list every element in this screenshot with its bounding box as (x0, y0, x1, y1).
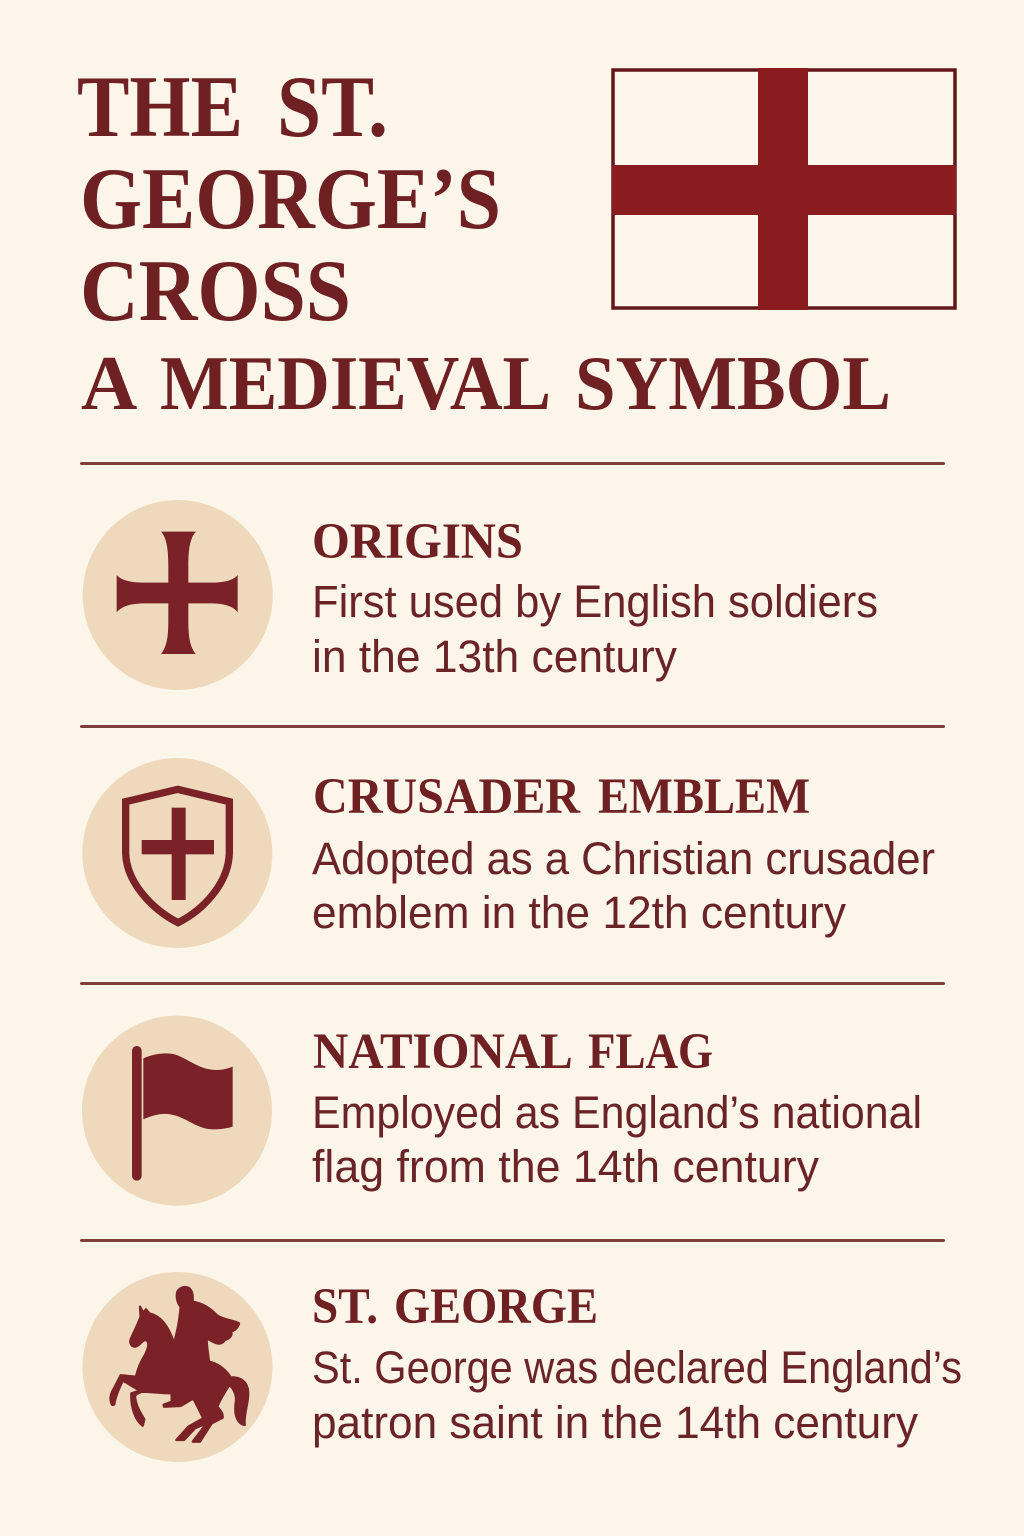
heading: St. George: GEORGE (394, 1279, 598, 1335)
text: national flag description: Employed as England’s national (312, 1087, 922, 1138)
icon: waving flag (82, 1016, 272, 1206)
panel: national flag (82, 1016, 922, 1206)
text: origins description: in the 13th century (312, 631, 677, 682)
title: SYMBOL (575, 340, 891, 426)
text: crusader emblem description: emblem in the 12th century (312, 887, 846, 938)
panel: origins (83, 500, 878, 690)
text: national flag description: flag from the 14th century (312, 1141, 819, 1192)
heading: crusader emblem: EMBLEM (598, 769, 810, 825)
heading: St. George: ST. (312, 1279, 378, 1335)
panel: crusader emblem (82, 758, 935, 948)
text: origins description: First used by English soldiers (312, 576, 878, 627)
icon: cross pattée (83, 500, 273, 690)
text: St. George description (312, 1342, 962, 1448)
icon: mounted rider silhouette (82, 1272, 272, 1462)
panel: St. George (82, 1272, 962, 1462)
title: CROSS (80, 243, 351, 340)
heading: national flag: FLAG (588, 1024, 713, 1080)
icon: St. George's Cross flag (612, 68, 956, 310)
title: MEDIEVAL (160, 340, 549, 426)
title: THE (77, 59, 243, 156)
text: national flag description (312, 1087, 922, 1192)
title: A (81, 340, 138, 426)
text: origins description (312, 576, 878, 682)
text: crusader emblem description (312, 833, 935, 938)
text: crusader emblem description: Adopted as a Christian crusader (312, 833, 935, 884)
heading: origins: ORIGINS (312, 514, 523, 570)
heading: crusader emblem: CRUSADER (313, 769, 581, 825)
text: St. George description: St. George was declared England’s (312, 1342, 962, 1393)
icon: shield with cross (82, 758, 272, 948)
text: St. George description: patron saint in the 14th century (312, 1397, 918, 1448)
title: GEORGE’S (80, 151, 501, 248)
title: ST. (277, 59, 388, 156)
heading: national flag: NATIONAL (313, 1024, 571, 1080)
title (77, 59, 891, 426)
